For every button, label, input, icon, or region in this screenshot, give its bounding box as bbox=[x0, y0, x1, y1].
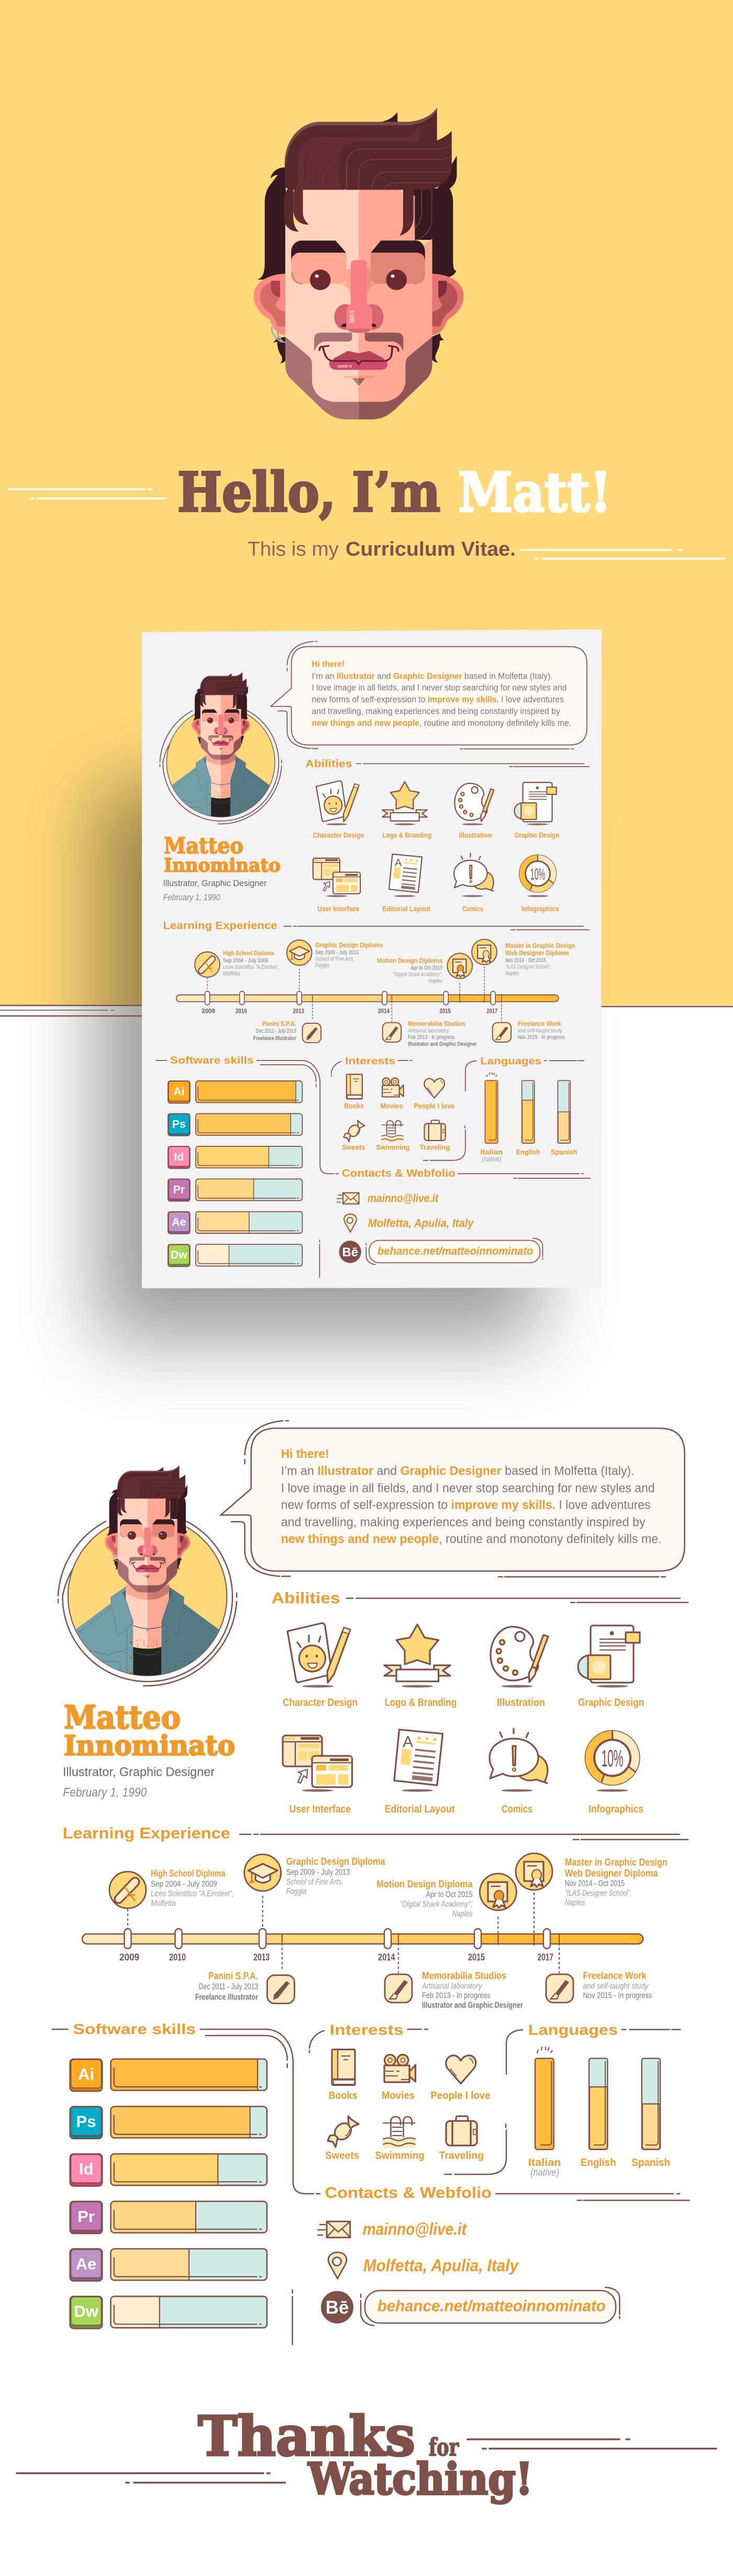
skill: Photoshop bbox=[70, 2106, 267, 2139]
badge: high school diploma bbox=[109, 1872, 146, 1908]
contact: location: Molfetta, Apulia, Italy bbox=[363, 2256, 519, 2275]
timeline bar with years: 2010 bbox=[169, 1952, 186, 1962]
text: motion design diploma bbox=[376, 1879, 473, 1918]
heading: Thanks for Watching!: for bbox=[429, 2433, 459, 2461]
illustration: flat portrait head bbox=[254, 107, 464, 419]
section heading: Contacts and Webfolio bbox=[325, 2184, 690, 2202]
subtitle: This is my Curriculum Vitae bbox=[248, 538, 516, 560]
avatar portrait in circle bbox=[58, 1465, 237, 1686]
heading: Hello, I'm Matt! bbox=[177, 461, 612, 524]
skill: After Effects: Ae bbox=[76, 2254, 96, 2273]
section heading: Software skills bbox=[52, 2021, 320, 2345]
icon: movies bbox=[384, 2055, 416, 2082]
contact: behance bbox=[321, 2287, 619, 2326]
skill: Illustrator bbox=[70, 2059, 267, 2091]
contact: email: mainno@live.it bbox=[363, 2220, 467, 2239]
skill: Photoshop: Ps bbox=[76, 2113, 96, 2131]
text: motion design diploma: Naples bbox=[452, 1909, 472, 1918]
language bar: Spanish: Spanish bbox=[631, 2157, 670, 2169]
text: master in graphic design: Web Designer Diploma bbox=[565, 1868, 658, 1879]
section heading: Learning Experience: Learning Experience bbox=[63, 1825, 230, 1842]
section heading: Languages: Languages bbox=[528, 2022, 618, 2038]
heading: Hello, I'm Matt!: Hello, I’m bbox=[177, 461, 440, 524]
skill: Dreamweaver: Dw bbox=[74, 2302, 99, 2320]
divider lines under hero bbox=[0, 1005, 733, 1016]
speech bubble: introduction bbox=[221, 1421, 685, 1577]
text: Memorabilia Studios: Memorabilia Studios bbox=[422, 1971, 506, 1982]
text: Panini S.P.A.: Panini S.P.A. bbox=[208, 1971, 258, 1982]
icon: infographics donut: 10% bbox=[602, 1745, 624, 1772]
birth date: February 1, 1990 bbox=[63, 1786, 147, 1800]
name: Matteo Innominato: Matteo bbox=[64, 1699, 181, 1737]
text: high school diploma: High School Diploma bbox=[151, 1868, 226, 1878]
text: master in graphic design: Nov 2014 - Oct 2015 bbox=[565, 1880, 625, 1888]
skill: InDesign: Id bbox=[79, 2160, 93, 2178]
heading: Thanks for Watching!: Watching! bbox=[308, 2454, 533, 2504]
skill: InDesign bbox=[70, 2154, 267, 2186]
icon: suitcase bbox=[446, 2116, 477, 2146]
speech bubble: introduction: Hi there! bbox=[281, 1447, 329, 1461]
text: motion design diploma: "Digital Shark Academy", bbox=[400, 1900, 472, 1909]
text: graphic design diploma: Foggia bbox=[286, 1887, 306, 1896]
icon: user interface bbox=[283, 1735, 352, 1792]
badge: master diploma bbox=[516, 1853, 552, 1890]
icon: illustration palette bbox=[491, 1627, 548, 1687]
speech bubble: introduction: I love image in all fields, and I never stop searching for new styles and bbox=[281, 1481, 655, 1495]
section heading: Abilities bbox=[272, 1590, 688, 1607]
section heading: Contacts and Webfolio: Contacts & Webfolio bbox=[325, 2184, 492, 2202]
language bar: English bbox=[581, 2059, 616, 2169]
language bar: English: English bbox=[581, 2157, 616, 2169]
name: Matteo Innominato bbox=[64, 1699, 235, 1762]
contact: email bbox=[317, 2220, 467, 2239]
paper drop shadow bbox=[97, 786, 539, 1341]
skill: Dreamweaver bbox=[70, 2296, 267, 2328]
label: swimming: Swimming bbox=[375, 2150, 425, 2161]
label: comics: Comics bbox=[502, 1804, 532, 1815]
text: Panini S.P.A.: Dec 2011 - July 2013 bbox=[199, 1982, 258, 1991]
text: Memorabilia Studios: Feb 2013 - In progress bbox=[422, 1992, 490, 2000]
icon: heart bbox=[446, 2055, 476, 2084]
icon: graphic design bbox=[578, 1626, 640, 1687]
timeline bar with years: 2009 bbox=[119, 1952, 139, 1962]
hero speed lines right bbox=[521, 550, 724, 559]
icon: editorial layout bbox=[394, 1730, 443, 1792]
text: high school diploma: Molfetta bbox=[151, 1899, 176, 1908]
speech bubble: introduction: new things and new people, routine and monotony definitely kills me. bbox=[281, 1532, 662, 1546]
timeline bar with years: 2014 bbox=[378, 1952, 395, 1962]
skill: Illustrator: Ai bbox=[78, 2065, 94, 2083]
badge: motion design diploma bbox=[480, 1874, 516, 1910]
name: Matteo Innominato: Innominato bbox=[64, 1730, 235, 1762]
text: high school diploma: Liceo Scientifico "A.Einstein", bbox=[151, 1889, 234, 1898]
skill: Premiere: Pr bbox=[77, 2207, 95, 2226]
closing speed lines bbox=[17, 2439, 716, 2483]
section heading: Interests: Interests bbox=[330, 2022, 404, 2038]
label: logo and branding: Logo & Branding bbox=[385, 1697, 457, 1708]
icon: character design bbox=[287, 1623, 350, 1687]
label: illustration: Illustration bbox=[497, 1697, 545, 1708]
text: master in graphic design bbox=[565, 1858, 668, 1907]
icon: swimming pool bbox=[383, 2117, 416, 2148]
icon: logo and branding bbox=[384, 1624, 450, 1687]
job title: Illustrator, Graphic Designer bbox=[63, 1765, 215, 1779]
text: motion design diploma: Apr to Oct 2015 bbox=[426, 1890, 472, 1899]
text: high school diploma: Sep 2004 - July 2009 bbox=[151, 1880, 217, 1889]
label: movies: Movies bbox=[382, 2090, 415, 2102]
text: graphic design diploma: Sep 2009 - July 2013 bbox=[286, 1868, 350, 1877]
section heading: Languages bbox=[506, 2022, 680, 2074]
contact: behance: Bē bbox=[326, 2297, 349, 2318]
subtitle: This is my Curriculum Vitae: This is my bbox=[248, 538, 339, 560]
icon: books bbox=[332, 2050, 355, 2085]
text: master in graphic design: Master in Graphic Design bbox=[565, 1858, 668, 1869]
section heading: Learning Experience bbox=[63, 1825, 688, 1842]
label: user interface: User Interface bbox=[289, 1804, 351, 1815]
heading: Thanks for Watching! bbox=[198, 2404, 533, 2504]
text: master in graphic design: Naples bbox=[565, 1898, 585, 1907]
label: infographics: Infographics bbox=[588, 1804, 643, 1815]
badge: graphic design diploma bbox=[245, 1854, 281, 1891]
label: graphic design: Graphic Design bbox=[578, 1697, 644, 1708]
section heading: Abilities: Abilities bbox=[272, 1590, 340, 1607]
language bar: Italian: (native) bbox=[530, 2167, 559, 2178]
label: sweets: Sweets bbox=[325, 2150, 359, 2161]
yellow hero background bbox=[0, 0, 733, 1005]
text: motion design diploma: Motion Design Diploma bbox=[376, 1879, 473, 1890]
icon: editorial layout: A bbox=[403, 1733, 413, 1751]
heading: Thanks for Watching!: Thanks bbox=[198, 2404, 415, 2469]
text: Freelance Work: Nov 2015 - In progress bbox=[583, 1992, 652, 2000]
text: master in graphic design: "ILAS Designer School", bbox=[565, 1889, 632, 1898]
timeline bar with years: 2013 bbox=[253, 1952, 270, 1962]
paper mockup of the CV bbox=[142, 629, 602, 1288]
speech bubble: introduction: new forms of self-expression to improve my skills. I love adventures bbox=[281, 1498, 651, 1512]
section heading: Software skills: Software skills bbox=[73, 2021, 196, 2037]
hero speed lines left bbox=[9, 489, 165, 499]
timeline bar with years bbox=[82, 1893, 643, 1973]
badge: Freelance pencil bbox=[546, 1974, 573, 2003]
text: high school diploma bbox=[151, 1868, 234, 1908]
language bar: Italian bbox=[528, 2047, 561, 2178]
subtitle: This is my Curriculum Vitae: Curriculum Vitae. bbox=[346, 538, 516, 560]
text: graphic design diploma: Graphic Design Diploma bbox=[286, 1856, 385, 1867]
label: people I love: People I love bbox=[430, 2090, 490, 2102]
text: Freelance Work bbox=[583, 1971, 652, 2000]
language bar: Spanish bbox=[631, 2059, 670, 2169]
badge: Memorabilia pencil bbox=[385, 1974, 412, 2003]
text: Memorabilia Studios: Illustrator and Graphic Designer bbox=[422, 2001, 523, 2010]
text: graphic design diploma: School of Fine Arts, bbox=[286, 1877, 343, 1886]
contact: behance: behance.net/matteoinnominato bbox=[377, 2297, 606, 2315]
text: Panini S.P.A. bbox=[195, 1971, 258, 2002]
full size curriculum vitae bbox=[52, 1421, 690, 2345]
label: traveling: Traveling bbox=[439, 2150, 484, 2161]
contact: location bbox=[328, 2252, 519, 2279]
label: books: Books bbox=[329, 2090, 357, 2102]
text: graphic design diploma bbox=[286, 1856, 385, 1896]
skill: After Effects bbox=[70, 2249, 267, 2281]
text: Freelance Work: and self-taught study bbox=[583, 1982, 649, 1991]
label: character design: Character Design bbox=[283, 1697, 358, 1708]
skill: Premiere bbox=[70, 2202, 267, 2234]
section heading: Interests bbox=[309, 2022, 506, 2174]
language bar: Italian: Italian bbox=[528, 2157, 561, 2169]
text: Memorabilia Studios: Artisanal laboratory bbox=[421, 1982, 482, 1991]
text: Panini S.P.A.: Freelance Illustrator bbox=[195, 1993, 258, 2002]
heading: Hello, I'm Matt!: Matt! bbox=[458, 461, 612, 524]
speech bubble: introduction: I’m an Illustrator and Graphic Designer based in Molfetta (Italy). bbox=[281, 1464, 635, 1478]
icon: comics bbox=[490, 1729, 548, 1792]
icon: infographics donut bbox=[585, 1730, 640, 1792]
badge: Panini pencil bbox=[267, 1975, 294, 2004]
speech bubble: introduction: and travelling, making experiences and being constantly inspired by bbox=[281, 1515, 646, 1529]
timeline bar with years: 2015 bbox=[468, 1952, 485, 1962]
text: Memorabilia Studios bbox=[421, 1971, 523, 2010]
icon: sweets bbox=[328, 2116, 359, 2147]
timeline bar with years: 2017 bbox=[537, 1952, 553, 1962]
label: editorial layout: Editorial Layout bbox=[385, 1804, 455, 1815]
text: Freelance Work: Freelance Work bbox=[583, 1971, 647, 1982]
